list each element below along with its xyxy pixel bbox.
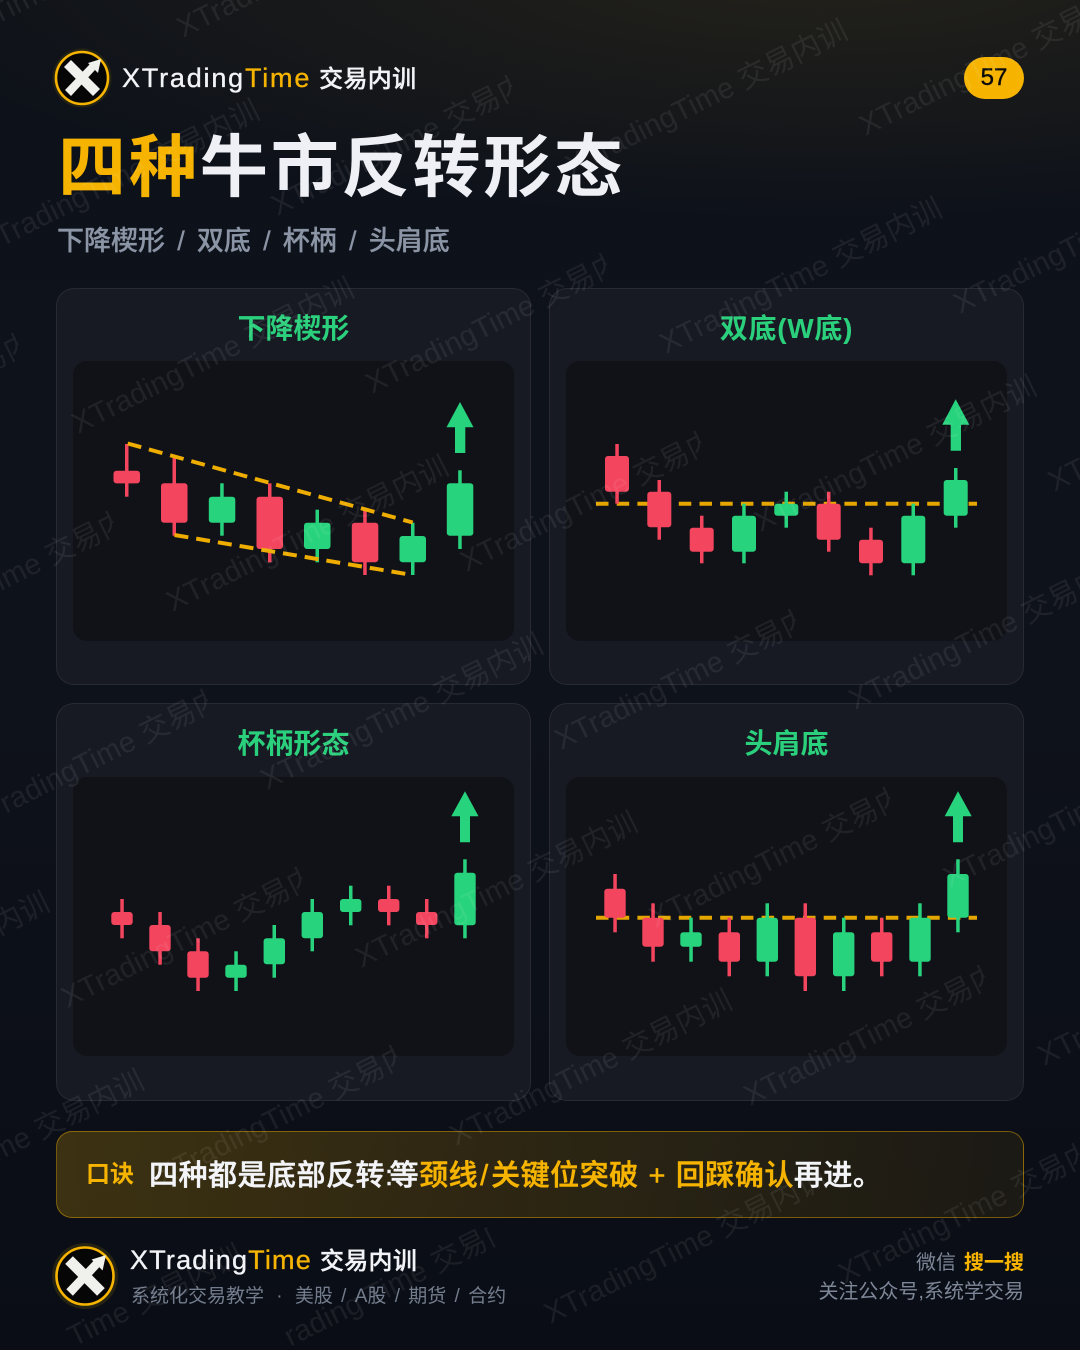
callout text: 四种都是底部反转:等颈线/关键位突破 + 回踩确认再进。 xyxy=(149,1160,882,1192)
candles: wedge xyxy=(114,444,473,575)
neckline xyxy=(596,502,977,506)
page number badge: 57 xyxy=(981,64,1007,91)
watermark layer: XTradingTime 交易内训 xyxy=(161,450,454,618)
heading: double bottom: 双底(W底) xyxy=(720,313,853,344)
watermark layer: XTradingTime 交易内训 xyxy=(360,232,654,400)
arrow: breakout xyxy=(942,399,969,451)
brand name: XTradingTime 交易内训 xyxy=(122,63,416,93)
footer follow note: 关注公众号,系统学交易 xyxy=(818,1281,1024,1303)
chart: cup and handle xyxy=(73,777,514,1056)
arrow: breakout xyxy=(945,791,972,842)
subtitle: 下降楔形 / 双底 / 杯柄 / 头肩底 xyxy=(57,226,450,256)
watermark layer: rading Time 交易内训 xyxy=(279,1198,546,1350)
watermark layer: XTradingTime 交易内训 xyxy=(66,272,360,440)
candles: head and shoulders xyxy=(604,859,969,991)
watermark layer: Time 交易内训 xyxy=(62,1238,248,1350)
watermark layer: XTradingTime 交易内训 xyxy=(749,370,1042,538)
callout label: 口诀 xyxy=(86,1161,134,1188)
header logo xyxy=(52,48,112,108)
watermark layer: XTradingTime 交易内训 xyxy=(266,54,559,222)
heading: head and shoulders bottom: 头肩底 xyxy=(744,728,828,759)
watermark layer: XTradingTime 交易内训 xyxy=(654,192,948,360)
watermark layer: XTradingTime 交易内训 xyxy=(56,846,349,1014)
footer brand name: XTradingTime 交易内训 xyxy=(130,1245,417,1275)
watermark layer: XTradingTime 交易内训 xyxy=(150,1024,444,1192)
footer tagline: 系统化交易教学 · 美股 / A股 / 期货 / 合约 xyxy=(131,1286,506,1307)
heading: cup and handle: 杯柄形态 xyxy=(237,728,350,759)
arrow: breakout xyxy=(451,791,478,842)
watermark layer: XTradingTime 交易内训 xyxy=(539,1162,832,1330)
candles: double bottom xyxy=(605,444,968,575)
watermark layer: XTradingTime 交易内训 xyxy=(738,944,1032,1112)
chart: double bottom xyxy=(566,361,1007,641)
heading: descending wedge: 下降楔形 xyxy=(237,313,350,344)
watermark layer: XTradingTime 交易内训 xyxy=(255,628,549,796)
watermark layer: XTradingTime 交易内训 xyxy=(644,766,937,934)
footer logo xyxy=(52,1243,118,1309)
callout: mnemonic xyxy=(56,1131,1024,1218)
watermark layer: XTradingTime 交易内训 xyxy=(549,588,843,756)
panel: double bottom xyxy=(549,288,1024,685)
panel: descending wedge xyxy=(56,288,531,685)
footer search prompt: 微信 搜一搜 xyxy=(916,1252,1024,1274)
panel: head and shoulders bottom xyxy=(549,703,1024,1101)
panel: cup and handle xyxy=(56,703,531,1101)
neckline xyxy=(596,916,977,920)
wedge upper trendline xyxy=(128,444,413,522)
watermark layer: XTradingTime 交易内训 xyxy=(560,14,853,182)
chart: descending wedge xyxy=(73,361,514,641)
wedge lower trendline xyxy=(174,535,412,575)
chart: head and shoulders bottom xyxy=(566,777,1007,1056)
watermark layer: XTradingTime 交易内训 xyxy=(350,806,643,974)
title: 四种牛市反转形态 xyxy=(58,130,625,206)
page number badge xyxy=(964,57,1024,99)
watermark layer: XTradingTime 交易内训 xyxy=(444,984,738,1152)
watermark layer: XTradingTime 交易内训 xyxy=(455,410,748,578)
arrow: breakout xyxy=(446,402,474,453)
candles: cup and handle xyxy=(111,859,476,991)
